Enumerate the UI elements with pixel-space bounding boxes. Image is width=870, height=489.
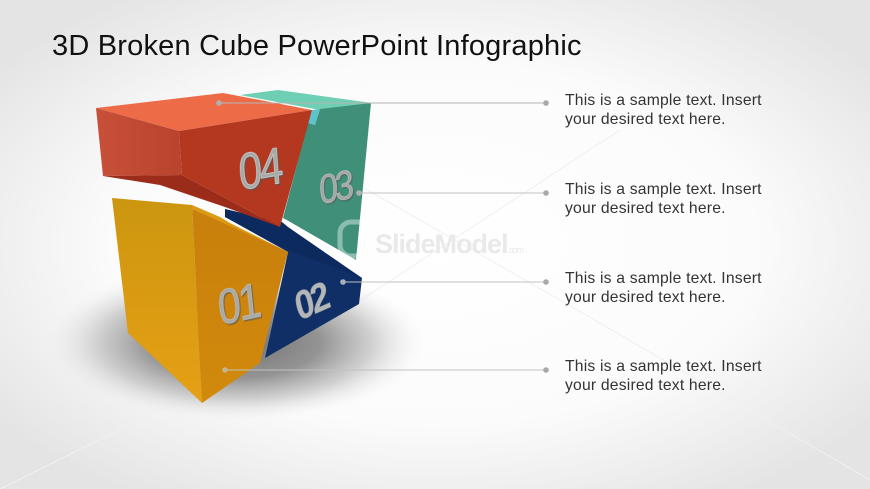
text block 01 xyxy=(565,358,762,394)
text block 04 xyxy=(565,92,762,128)
leader line 04 xyxy=(216,100,549,106)
text block 03: your desired text here. xyxy=(565,200,726,217)
cube piece 01: gold xyxy=(112,198,288,403)
cube piece 03: green xyxy=(240,90,372,260)
text block 03 xyxy=(565,181,762,217)
leader line 03 xyxy=(356,190,549,196)
watermark: SlideModel: SlideModel.com xyxy=(375,229,524,259)
text block 01: your desired text here. xyxy=(565,377,726,394)
leader line 02 xyxy=(340,279,549,285)
text block 02: This is a sample text. Insert xyxy=(565,270,762,287)
leader line 01 xyxy=(222,367,549,373)
watermark: SlideModel xyxy=(340,222,524,259)
number 04: 04 xyxy=(237,137,284,201)
white gap between green and navy xyxy=(285,219,363,278)
text block 02 xyxy=(565,270,762,306)
title: 3D Broken Cube PowerPoint Infographic xyxy=(52,30,582,62)
number 01: 01 xyxy=(215,272,263,336)
number 02: 02 xyxy=(290,272,333,329)
text block 01: This is a sample text. Insert xyxy=(565,358,762,375)
text block 04: This is a sample text. Insert xyxy=(565,92,762,109)
text block 03: This is a sample text. Insert xyxy=(565,181,762,198)
cube piece 04: red xyxy=(96,93,312,227)
text block 04: your desired text here. xyxy=(565,111,726,128)
text block 02: your desired text here. xyxy=(565,289,726,306)
cube shadow xyxy=(45,265,425,421)
number 03: 03 xyxy=(318,161,354,213)
cube piece 02: navy xyxy=(225,209,362,358)
